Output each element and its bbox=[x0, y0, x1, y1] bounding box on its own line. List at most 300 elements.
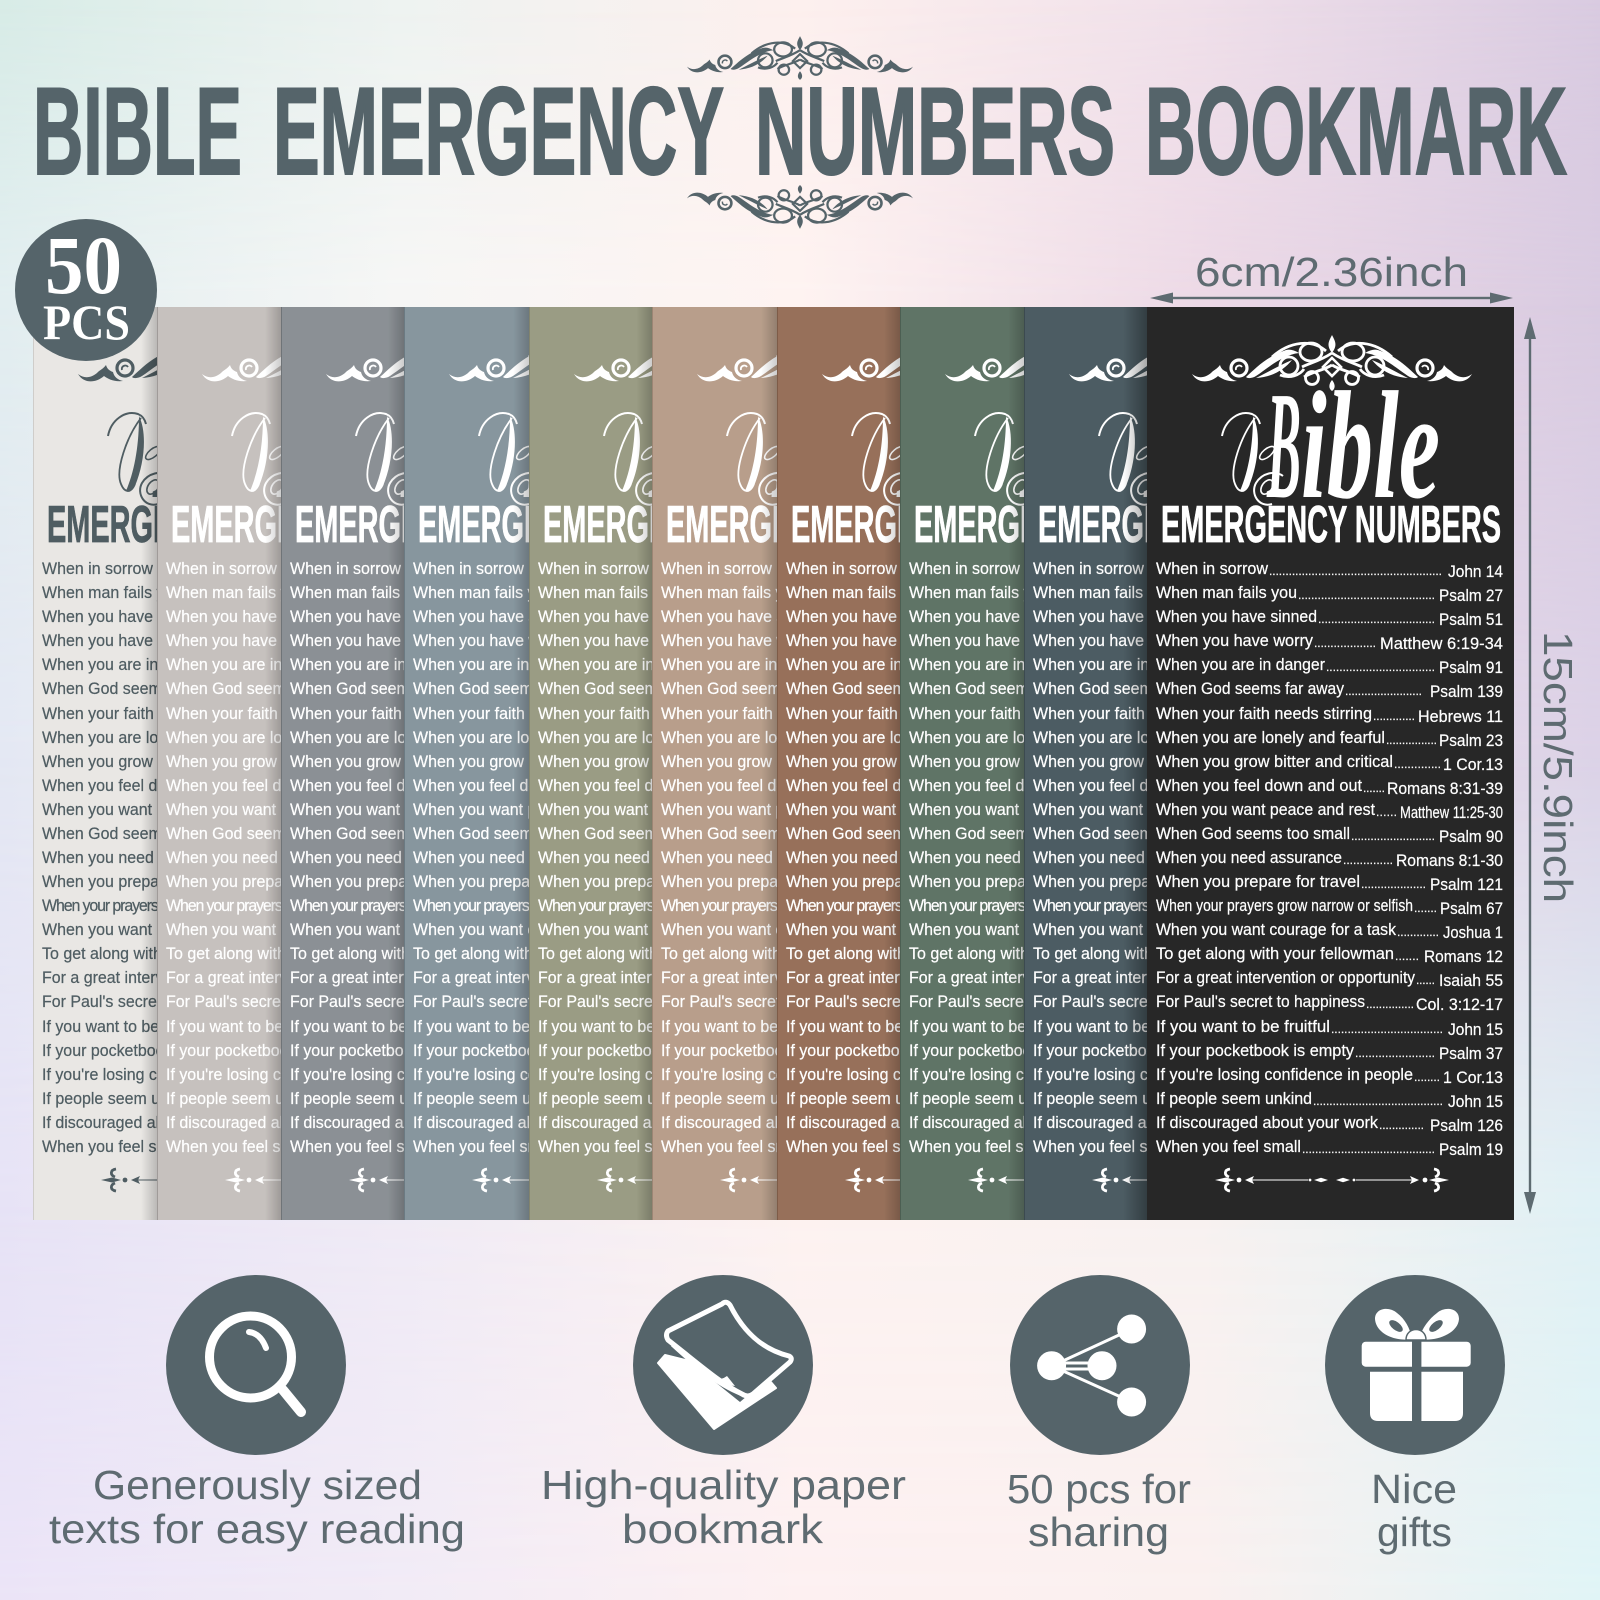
bookmark card: brown: When you grow bitter and critical bbox=[786, 753, 1018, 771]
bookmark card: forest green: When you are lonely and fearful bbox=[909, 729, 1134, 747]
bookmark card: tan: When you have sinned bbox=[661, 608, 823, 626]
bookmark card: forest green: When your faith needs stirring bbox=[909, 705, 1121, 723]
verse list: When you feel small bbox=[1156, 1137, 1301, 1156]
bookmark card: sage: When you need assurance bbox=[538, 849, 728, 867]
bookmark card: grey: To get along with your fellowman bbox=[290, 945, 522, 963]
verse list: Isaiah 55 bbox=[1439, 971, 1503, 990]
verse list: When in sorrow bbox=[1156, 559, 1269, 578]
verse list: .............. bbox=[1394, 757, 1441, 771]
bookmark card: grey: When God seems far away bbox=[290, 680, 483, 698]
verse list: When you grow bitter and critical bbox=[1156, 752, 1393, 771]
verse list: ...... bbox=[1416, 973, 1435, 987]
verse list: If you want to be fruitful bbox=[1156, 1017, 1330, 1036]
bookmark card: forest green: When God seems far away bbox=[909, 680, 1102, 698]
verse list: ......................................... bbox=[1302, 1142, 1435, 1156]
bookmark card: dark slate: When you have sinned bbox=[1033, 608, 1195, 626]
bookmark card: tan: If you want to be fruitful bbox=[661, 1018, 826, 1036]
bookmark card: grey: When you want peace and rest bbox=[290, 801, 511, 819]
badge: 50 PCS bbox=[15, 219, 157, 361]
verse list: When man fails you bbox=[1156, 583, 1297, 602]
bookmark card: grey: When you have sinned bbox=[290, 608, 452, 626]
bookmark card: slate blue: When you want courage for a task bbox=[413, 921, 656, 939]
verse list: ............... bbox=[1343, 853, 1393, 867]
bookmark card: off-white: If discouraged about your work bbox=[42, 1114, 261, 1132]
bookmark card: forest green: When in sorrow bbox=[909, 560, 1020, 578]
bookmark card: tan: When your prayers grow narrow bbox=[661, 897, 857, 915]
bookmark card: grey: When you want courage for a task bbox=[290, 921, 533, 939]
bookmark card: dark slate: When you have worry bbox=[1033, 632, 1188, 650]
bookmark card: dark slate: When you want peace and rest bbox=[1033, 801, 1254, 819]
bookmark card: forest green: When you want peace and rest bbox=[909, 801, 1130, 819]
bookmark card: slate blue: When you have worry bbox=[413, 632, 568, 650]
ornament below title bbox=[687, 185, 913, 229]
bookmark card: tan: When in sorrow bbox=[661, 560, 772, 578]
bookmark card: brown: When you feel down and out bbox=[786, 777, 989, 795]
verse list: When your faith needs stirring bbox=[1156, 704, 1372, 723]
verse list: 1 Cor.13 bbox=[1443, 755, 1503, 774]
bookmark card: dark slate: B bbox=[1143, 361, 1178, 531]
bookmark card: taupe: When you want courage for a task bbox=[166, 921, 409, 939]
verse list: ............. bbox=[1373, 709, 1415, 723]
bookmark card: tan: When you need assurance bbox=[661, 849, 851, 867]
bookmark card: black, fully visible bbox=[1147, 307, 1514, 1220]
bookmark card: dark slate: If you want to be fruitful bbox=[1033, 1018, 1198, 1036]
bookmark card: grey: When you feel small bbox=[290, 1138, 434, 1156]
bookmark card: slate blue: B bbox=[523, 361, 558, 531]
bookmark card: grey: If you're losing confidence bbox=[290, 1066, 474, 1084]
bookmark card: tan: For Paul's secret to happiness bbox=[661, 993, 875, 1011]
bookmark card: slate blue: For Paul's secret to happiness bbox=[413, 993, 627, 1011]
icon: share nodes bbox=[1010, 1275, 1190, 1455]
bookmark card: tan: When you have worry bbox=[661, 632, 816, 650]
bookmark card: forest green: To get along with your fellowman bbox=[909, 945, 1141, 963]
bookmark card: forest green: When you feel down and out bbox=[909, 777, 1112, 795]
bookmark card: slate blue: To get along with your fellowman bbox=[413, 945, 645, 963]
bookmark card: grey: B bbox=[400, 361, 435, 531]
verse list: ................................. bbox=[1326, 660, 1435, 674]
height arrow bbox=[1524, 317, 1536, 1214]
bookmark card: dark slate: If discouraged about your work bbox=[1033, 1114, 1252, 1132]
verse list: When you want courage for a task bbox=[1156, 920, 1396, 939]
bookmark card: sage: When you are in danger bbox=[538, 656, 709, 674]
bookmark card: brown: When you have worry bbox=[786, 632, 941, 650]
verse list: Psalm 67 bbox=[1440, 899, 1503, 918]
verse list: ....... bbox=[1395, 949, 1419, 963]
bookmark card: dark slate: When you feel down and out bbox=[1033, 777, 1236, 795]
bookmark card: off-white: If you're losing confidence bbox=[42, 1066, 226, 1084]
width dimension label: 6cm/2.36inch bbox=[1195, 249, 1468, 295]
bookmark card: off-white: When you want courage for a task bbox=[42, 921, 285, 939]
verse list: ........................ bbox=[1345, 684, 1422, 698]
bookmark card: taupe: If you're losing confidence bbox=[166, 1066, 350, 1084]
verse list: When you are in danger bbox=[1156, 655, 1325, 674]
bookmark card: tan: When man fails you bbox=[661, 584, 801, 602]
verse list: Psalm 126 bbox=[1430, 1116, 1503, 1135]
bookmark card: tan: If your pocketbook is empty bbox=[661, 1042, 856, 1060]
bookmark card: forest green: If your pocketbook is empty bbox=[909, 1042, 1104, 1060]
verse list: When you feel down and out bbox=[1156, 776, 1362, 795]
verse list: When God seems far away bbox=[1156, 679, 1344, 698]
bookmark card: sage: When God seems too small bbox=[538, 825, 734, 843]
verse list: .................................. bbox=[1331, 1022, 1443, 1036]
bookmark card: sage: When God seems far away bbox=[538, 680, 731, 698]
bookmark card: dark slate: If you're losing confidence bbox=[1033, 1066, 1217, 1084]
bookmark card: brown: If your pocketbook is empty bbox=[786, 1042, 981, 1060]
bookmark card: forest green: When you prepare for travel bbox=[909, 873, 1107, 891]
verse list: .......................... bbox=[1351, 829, 1435, 843]
verse list: ............... bbox=[1366, 997, 1414, 1011]
bookmark card: grey: When you have worry bbox=[290, 632, 445, 650]
bookmark card: sage: When you feel small bbox=[538, 1138, 682, 1156]
bookmark card: brown: When your prayers grow narrow bbox=[786, 897, 982, 915]
bookmark card: taupe: For a great intervention bbox=[166, 969, 331, 987]
ornament bbox=[1192, 335, 1472, 391]
bookmark card: slate blue: When you are in danger bbox=[413, 656, 584, 674]
bookmark card: off-white: When you grow bitter and critical bbox=[42, 753, 274, 771]
bookmark card: forest green: When your prayers grow narrow bbox=[909, 897, 1105, 915]
height dimension label: 15cm/5.9inch bbox=[1535, 631, 1581, 903]
caption: Generously sized bbox=[93, 1462, 422, 1508]
bookmark card: slate blue: For a great intervention bbox=[413, 969, 578, 987]
bookmark card: dark slate: When you need assurance bbox=[1033, 849, 1223, 867]
bookmark card: tan: If you're losing confidence bbox=[661, 1066, 845, 1084]
verse list: Joshua 1 bbox=[1443, 923, 1503, 942]
bookmark card: brown: When you have sinned bbox=[786, 608, 948, 626]
bookmark card: off-white: When in sorrow bbox=[42, 560, 153, 578]
verse list: If your pocketbook is empty bbox=[1156, 1041, 1354, 1060]
verse list: For Paul's secret to happiness bbox=[1156, 992, 1365, 1011]
footer divider bbox=[1215, 1169, 1449, 1191]
bookmark card: off-white: To get along with your fellowman bbox=[42, 945, 274, 963]
bookmark card: off-white: When your faith needs stirring bbox=[42, 705, 254, 723]
bookmark card: grey bbox=[281, 307, 635, 1220]
bookmark card: off-white: For a great intervention bbox=[42, 969, 207, 987]
verse list: Hebrews 11 bbox=[1418, 707, 1503, 726]
bookmark card: forest green: When you feel small bbox=[909, 1138, 1053, 1156]
icon: magnifying glass bbox=[166, 1275, 346, 1455]
bookmark card: brown: When you are in danger bbox=[786, 656, 957, 674]
bookmark card: tan: When you are lonely and fearful bbox=[661, 729, 886, 747]
bookmark card: grey: For a great intervention bbox=[290, 969, 455, 987]
bookmark card: brown: When God seems far away bbox=[786, 680, 979, 698]
bookmark card: sage: When man fails you bbox=[538, 584, 678, 602]
bookmark card: brown: When you want courage for a task bbox=[786, 921, 1029, 939]
bookmark card: off-white: When you prepare for travel bbox=[42, 873, 240, 891]
bookmark card: off-white: When your prayers grow narrow bbox=[42, 897, 238, 915]
bookmark card: dark slate: When you are lonely and fearful bbox=[1033, 729, 1258, 747]
bookmark card: taupe: When God seems far away bbox=[166, 680, 359, 698]
bookmark card: sage: For Paul's secret to happiness bbox=[538, 993, 752, 1011]
bookmark card: slate blue: When you need assurance bbox=[413, 849, 603, 867]
bookmark card: brown: When you are lonely and fearful bbox=[786, 729, 1011, 747]
verse list: Psalm 121 bbox=[1430, 875, 1503, 894]
bookmark card: tan: When God seems too small bbox=[661, 825, 857, 843]
verse list: ...... bbox=[1376, 805, 1397, 819]
feature: high-quality paper bbox=[541, 1275, 906, 1552]
bookmark card: sage: B bbox=[648, 361, 683, 531]
verse list: Romans 8:1-30 bbox=[1396, 851, 1503, 870]
ornament above title bbox=[687, 36, 913, 80]
verse list: When you are lonely and fearful bbox=[1156, 728, 1385, 747]
bookmark card: grey: When you feel down and out bbox=[290, 777, 493, 795]
bookmark card: grey: If people seem unkind bbox=[290, 1090, 446, 1108]
bookmark card: grey: When you are lonely and fearful bbox=[290, 729, 515, 747]
bookmark card: dark slate: For Paul's secret to happiness bbox=[1033, 993, 1247, 1011]
bookmark card: forest green: When God seems too small bbox=[909, 825, 1105, 843]
bookmark card: tan: If discouraged about your work bbox=[661, 1114, 880, 1132]
caption: 50 pcs for bbox=[1007, 1466, 1191, 1512]
bookmark card: slate blue: When God seems too small bbox=[413, 825, 609, 843]
bookmark card: forest green: If you're losing confidence bbox=[909, 1066, 1093, 1084]
caption: texts for easy reading bbox=[49, 1506, 465, 1552]
verse list: John 15 bbox=[1448, 1092, 1503, 1111]
bookmark card: forest green bbox=[900, 307, 1254, 1220]
verse list: ....... bbox=[1414, 901, 1437, 915]
bookmark card: off-white: When you are lonely and fearful bbox=[42, 729, 267, 747]
bookmark card: slate blue: When you want peace and rest bbox=[413, 801, 634, 819]
bookmark card: forest green: When you are in danger bbox=[909, 656, 1080, 674]
bookmark card: dark slate: If your pocketbook is empty bbox=[1033, 1042, 1228, 1060]
bookmark card: brown: When you want peace and rest bbox=[786, 801, 1007, 819]
bookmark card: sage: To get along with your fellowman bbox=[538, 945, 770, 963]
verse list: When you want peace and rest bbox=[1156, 800, 1375, 819]
bookmark card: dark slate: For a great intervention bbox=[1033, 969, 1198, 987]
bookmark card: off-white: If you want to be fruitful bbox=[42, 1018, 207, 1036]
bookmark card: off-white: When God seems too small bbox=[42, 825, 238, 843]
bookmark card: brown: To get along with your fellowman bbox=[786, 945, 1018, 963]
verse list: Psalm 27 bbox=[1439, 586, 1503, 605]
bookmark card: slate blue: When you prepare for travel bbox=[413, 873, 611, 891]
title: NUMBERS bbox=[755, 63, 1115, 201]
bookmark card: taupe: When you grow bitter and critical bbox=[166, 753, 398, 771]
bookmark card: slate blue: If people seem unkind bbox=[413, 1090, 569, 1108]
bookmark card: taupe: If your pocketbook is empty bbox=[166, 1042, 361, 1060]
verse list: ................ bbox=[1386, 733, 1437, 747]
verse list: When you prepare for travel bbox=[1156, 872, 1360, 891]
bookmark card: off-white: If people seem unkind bbox=[42, 1090, 198, 1108]
feature: generously sized texts bbox=[49, 1275, 465, 1552]
bookmark card: grey: If discouraged about your work bbox=[290, 1114, 509, 1132]
bookmark card: forest green: If people seem unkind bbox=[909, 1090, 1065, 1108]
bookmark card: forest green: If you want to be fruitful bbox=[909, 1018, 1074, 1036]
bookmark card: sage: If you're losing confidence bbox=[538, 1066, 722, 1084]
bookmark card: off-white: B bbox=[152, 361, 187, 531]
bookmark card: taupe: When you are lonely and fearful bbox=[166, 729, 391, 747]
bookmark card: off-white: When man fails you bbox=[42, 584, 182, 602]
verse list: ....... bbox=[1363, 781, 1385, 795]
bookmark card: brown: When you prepare for travel bbox=[786, 873, 984, 891]
verse list: When you have sinned bbox=[1156, 607, 1317, 626]
verse list: Col. 3:12-17 bbox=[1416, 995, 1503, 1014]
bookmark card: sage: When you are lonely and fearful bbox=[538, 729, 763, 747]
bookmark card: tan: When you want peace and rest bbox=[661, 801, 882, 819]
bookmark card: forest green: For Paul's secret to happiness bbox=[909, 993, 1123, 1011]
bookmark card: brown: If you're losing confidence bbox=[786, 1066, 970, 1084]
verse list: 1 Cor.13 bbox=[1443, 1068, 1503, 1087]
bookmark card: taupe: When in sorrow bbox=[166, 560, 277, 578]
bookmark card: brown: For Paul's secret to happiness bbox=[786, 993, 1000, 1011]
bookmark card: sage: When you grow bitter and critical bbox=[538, 753, 770, 771]
verse list: Romans 8:31-39 bbox=[1387, 779, 1503, 798]
bookmark card: grey: When your prayers grow narrow bbox=[290, 897, 486, 915]
bookmark card: grey: When God seems too small bbox=[290, 825, 486, 843]
bookmark card: sage bbox=[529, 307, 883, 1220]
bookmark card: slate blue: When you feel down and out bbox=[413, 777, 616, 795]
bookmark card: brown: For a great intervention bbox=[786, 969, 951, 987]
bookmark card: off-white: When you are in danger bbox=[42, 656, 213, 674]
bookmark card: tan: When you are in danger bbox=[661, 656, 832, 674]
verse list: If you're losing confidence in people bbox=[1156, 1065, 1413, 1084]
bookmark card: sage: When you want courage for a task bbox=[538, 921, 781, 939]
feature: nice gifts bbox=[1325, 1275, 1505, 1555]
bookmark card: tan: To get along with your fellowman bbox=[661, 945, 893, 963]
bookmark card: brown: B bbox=[896, 361, 931, 531]
bookmark card: tan: When you grow bitter and critical bbox=[661, 753, 893, 771]
bookmark card: sage: For a great intervention bbox=[538, 969, 703, 987]
bookmark card: grey: When you prepare for travel bbox=[290, 873, 488, 891]
verse list: John 15 bbox=[1448, 1020, 1503, 1039]
verse list: To get along with your fellowman bbox=[1156, 944, 1394, 963]
verse list: .................... bbox=[1361, 877, 1426, 891]
bookmark card: taupe: When you prepare for travel bbox=[166, 873, 364, 891]
verse list: Psalm 37 bbox=[1439, 1044, 1503, 1063]
bookmark card: taupe: If people seem unkind bbox=[166, 1090, 322, 1108]
caption bbox=[49, 1462, 465, 1552]
bookmark card: slate blue: If discouraged about your work bbox=[413, 1114, 632, 1132]
verse list: Psalm 139 bbox=[1430, 682, 1503, 701]
bookmark card: tan: When God seems far away bbox=[661, 680, 854, 698]
bookmark card: dark slate: When God seems far away bbox=[1033, 680, 1226, 698]
bookmark card: off-white: If your pocketbook is empty bbox=[42, 1042, 237, 1060]
badge: 50 PCS: PCS bbox=[43, 294, 130, 350]
bookmark card: grey: When you grow bitter and critical bbox=[290, 753, 522, 771]
bookmark card: sage: If your pocketbook is empty bbox=[538, 1042, 733, 1060]
verse list: Psalm 51 bbox=[1439, 610, 1503, 629]
heading: Bible bbox=[1222, 361, 1440, 531]
verse list: ................... bbox=[1314, 636, 1376, 650]
bookmark card: sage: If discouraged about your work bbox=[538, 1114, 757, 1132]
icon: gift box bbox=[1325, 1275, 1505, 1455]
bookmark card: off-white: When you have sinned bbox=[42, 608, 204, 626]
verse list: When you have worry bbox=[1156, 631, 1313, 650]
badge: 50 PCS: 50 bbox=[45, 219, 122, 311]
bookmark card: slate blue: When in sorrow bbox=[413, 560, 524, 578]
bookmark card: slate blue: When you grow bitter and critical bbox=[413, 753, 645, 771]
bookmark card: taupe: When you have worry bbox=[166, 632, 321, 650]
bookmark card: slate blue: When you are lonely and fearful bbox=[413, 729, 638, 747]
bookmark card: sage: When in sorrow bbox=[538, 560, 649, 578]
bookmark card: taupe: When you want peace and rest bbox=[166, 801, 387, 819]
heading: Bible: B bbox=[1266, 361, 1301, 531]
caption bbox=[1007, 1466, 1191, 1555]
bookmark card: forest green: B bbox=[1019, 361, 1054, 531]
bookmark card: dark slate: When your prayers grow narrow bbox=[1033, 897, 1229, 915]
bookmark card: brown: When your faith needs stirring bbox=[786, 705, 998, 723]
bookmark card: sage: When you have sinned bbox=[538, 608, 700, 626]
verse list: Romans 12 bbox=[1424, 947, 1503, 966]
title: EMERGENCY bbox=[273, 63, 724, 201]
bookmark card: brown: If people seem unkind bbox=[786, 1090, 942, 1108]
bookmark card: taupe: When you feel down and out bbox=[166, 777, 369, 795]
bookmark card: taupe: When you are in danger bbox=[166, 656, 337, 674]
verse list: Psalm 90 bbox=[1439, 827, 1503, 846]
bookmark card: tan: When you feel small bbox=[661, 1138, 805, 1156]
bookmark card: slate blue: If you want to be fruitful bbox=[413, 1018, 578, 1036]
bookmark card: dark slate: When you want courage for a task bbox=[1033, 921, 1276, 939]
verse list: For a great intervention or opportunity bbox=[1156, 968, 1415, 987]
bookmark card: brown: If you want to be fruitful bbox=[786, 1018, 951, 1036]
bookmark card: forest green: When you grow bitter and critical bbox=[909, 753, 1141, 771]
bookmark card: brown: When God seems too small bbox=[786, 825, 982, 843]
bookmark card: taupe: If discouraged about your work bbox=[166, 1114, 385, 1132]
caption bbox=[541, 1462, 906, 1552]
bookmark card: taupe: When your faith needs stirring bbox=[166, 705, 378, 723]
verse list: Psalm 19 bbox=[1439, 1140, 1503, 1159]
bookmark card: slate blue: When your faith needs stirring bbox=[413, 705, 625, 723]
bookmark card: slate blue: When your prayers grow narrow bbox=[413, 897, 609, 915]
bookmark card: forest green: For a great intervention bbox=[909, 969, 1074, 987]
bookmark card: taupe: When man fails you bbox=[166, 584, 306, 602]
verse list: If people seem unkind bbox=[1156, 1089, 1312, 1108]
verse list: ........ bbox=[1414, 1070, 1440, 1084]
verse list: ............. bbox=[1397, 925, 1439, 939]
bookmark card: tan bbox=[652, 307, 1006, 1220]
bookmark card: tan: If people seem unkind bbox=[661, 1090, 817, 1108]
bookmark card: dark slate: When God seems too small bbox=[1033, 825, 1229, 843]
bookmark card: off-white: When you have worry bbox=[42, 632, 197, 650]
verse list: Psalm 91 bbox=[1439, 658, 1503, 677]
bookmark card: slate blue: When you feel small bbox=[413, 1138, 557, 1156]
bookmark card: sage: If people seem unkind bbox=[538, 1090, 694, 1108]
bookmark card: sage: When you feel down and out bbox=[538, 777, 741, 795]
bookmark card: forest green: When man fails you bbox=[909, 584, 1049, 602]
verse list: John 14 bbox=[1448, 562, 1503, 581]
bookmark card: slate blue: When God seems far away bbox=[413, 680, 606, 698]
bookmark card: off-white: When you feel down and out bbox=[42, 777, 245, 795]
bookmark card: off-white: When you feel small bbox=[42, 1138, 186, 1156]
bookmark card: brown bbox=[777, 307, 1131, 1220]
bookmark card: sage: When you have worry bbox=[538, 632, 693, 650]
bookmark card: off-white: When you want peace and rest bbox=[42, 801, 263, 819]
caption: sharing bbox=[1028, 1509, 1169, 1555]
bookmark card: grey: For Paul's secret to happiness bbox=[290, 993, 504, 1011]
icon: paper sheets bbox=[633, 1275, 813, 1455]
verse list: .................................... bbox=[1318, 612, 1435, 626]
verse list: .............. bbox=[1379, 1118, 1424, 1132]
bookmark card: sage: If you want to be fruitful bbox=[538, 1018, 703, 1036]
bookmark card: grey: When you are in danger bbox=[290, 656, 461, 674]
bookmark card: grey: If you want to be fruitful bbox=[290, 1018, 455, 1036]
bookmark card: tan: When your faith needs stirring bbox=[661, 705, 873, 723]
bookmark card: forest green: When you have worry bbox=[909, 632, 1064, 650]
bookmark card: grey: If your pocketbook is empty bbox=[290, 1042, 485, 1060]
verse list bbox=[1156, 559, 1503, 1159]
bookmark card: dark slate: When you are in danger bbox=[1033, 656, 1204, 674]
verse list: Matthew 6:19-34 bbox=[1380, 634, 1503, 653]
caption bbox=[1371, 1466, 1457, 1555]
bookmark card: grey: When your faith needs stirring bbox=[290, 705, 502, 723]
bookmark card: dark slate: When you grow bitter and critical bbox=[1033, 753, 1265, 771]
bookmark card: grey: When in sorrow bbox=[290, 560, 401, 578]
bookmark card: taupe: When God seems too small bbox=[166, 825, 362, 843]
verse list: ..................................................... bbox=[1269, 564, 1442, 578]
bookmark card: grey: When you need assurance bbox=[290, 849, 480, 867]
title bbox=[33, 63, 1567, 201]
verse list: ........................ bbox=[1355, 1046, 1435, 1060]
caption: bookmark bbox=[622, 1506, 824, 1552]
bookmark card: slate blue bbox=[404, 307, 758, 1220]
verse list: When God seems too small bbox=[1156, 824, 1350, 843]
